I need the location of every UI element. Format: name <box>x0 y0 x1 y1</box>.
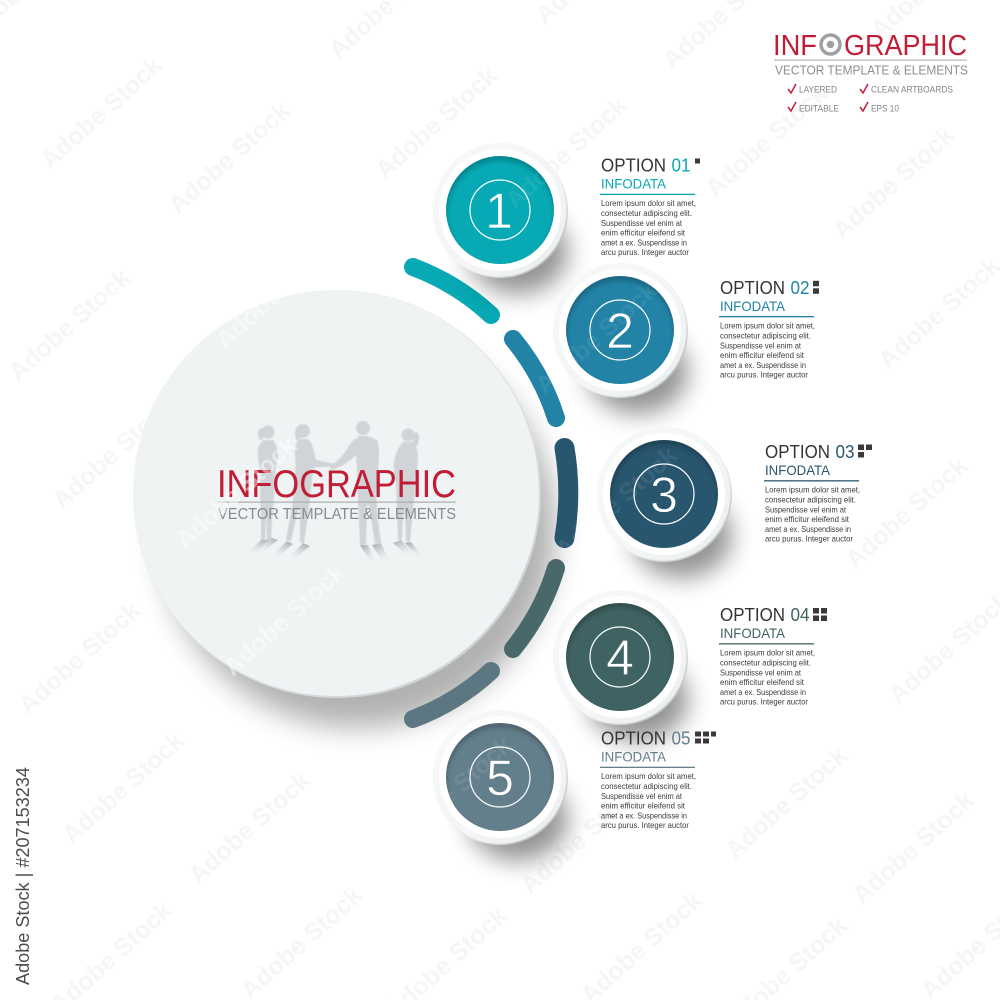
logo: top right infographic header: CLEAN ARTBOARDS <box>871 84 953 94</box>
text block: option 04: OPTION <box>720 604 785 625</box>
title: central infographic heading: VECTOR TEMPLATE & ELEMENTS <box>218 506 456 523</box>
text block: option 03: arcu purus. Integer auctor <box>765 534 853 544</box>
text block: option 05: 05 <box>672 728 690 749</box>
text block: option 04: Suspendisse vel enim at <box>720 668 802 678</box>
person 4 <box>394 428 419 542</box>
vertical stock credit text: Adobe Stock | #207153234 <box>13 767 33 985</box>
text block: option 04: 04 <box>790 604 810 625</box>
illustration: business people silhouettes <box>247 421 424 564</box>
arc segments around central circle <box>413 267 568 719</box>
text block: option 04: amet a ex. Suspendisse in <box>720 687 806 697</box>
text block: option 03: 03 <box>836 441 854 462</box>
option 2 circle <box>553 263 688 414</box>
text block: option 02: enim efficitur eleifend sit <box>720 350 805 360</box>
text: Adobe Stock <box>530 276 663 399</box>
text: Adobe Stock <box>170 431 303 554</box>
text: Adobe Stock <box>47 391 180 514</box>
logo: top right infographic header: EPS 10 <box>871 104 899 114</box>
text block: option 05 <box>600 728 716 830</box>
text block: option 02: INFODATA <box>720 298 786 314</box>
text block: option 02: 02 <box>790 277 810 298</box>
text: Adobe Stock <box>720 741 853 864</box>
text block: option 04 <box>719 604 827 706</box>
text block: option 04: consectetur adipiscing elit. <box>720 658 811 668</box>
text block: option 05: arcu purus. Integer auctor <box>601 820 689 830</box>
text: Adobe Stock <box>3 263 136 386</box>
text: Adobe Stock <box>827 121 960 244</box>
text block: option 02: Suspendisse vel enim at <box>720 340 802 350</box>
person 3 man <box>330 421 381 545</box>
text block: option 03: INFODATA <box>765 462 831 478</box>
logo: top right infographic header: INF <box>773 30 817 62</box>
person 2 <box>286 424 336 543</box>
text block: option 01: enim efficitur eleifend sit <box>601 228 686 238</box>
text block: option 02: OPTION <box>720 277 785 298</box>
text: Adobe Stock <box>210 231 343 354</box>
text block: option 03: consectetur adipiscing elit. <box>765 494 856 504</box>
text block: option 02 <box>719 277 819 379</box>
text: Adobe Stock <box>163 96 296 219</box>
text block: option 05: INFODATA <box>601 748 667 764</box>
text block: option 01: Lorem ipsum dolor sit amet, <box>601 198 696 208</box>
text block: option 05: OPTION <box>601 728 666 749</box>
option 1 circle: 1 <box>485 183 513 239</box>
option 4 circle <box>553 590 688 741</box>
text: Adobe Stock <box>57 726 190 849</box>
logo: top right infographic header: VECTOR TEMPLATE & ELEMENTS <box>775 62 968 78</box>
logo: top right infographic header: LAYERED <box>799 84 837 94</box>
text block: option 01: amet a ex. Suspendisse in <box>601 238 687 248</box>
title: central infographic heading: INFOGRAPHIC <box>217 463 456 506</box>
text block: option 05: Lorem ipsum dolor sit amet, <box>601 771 696 781</box>
logo: top right infographic header: GRAPHIC <box>844 30 967 62</box>
text: Adobe Stock <box>550 441 683 564</box>
text block: option 03: Suspendisse vel enim at <box>765 504 847 514</box>
text block: option 05: consectetur adipiscing elit. <box>601 781 692 791</box>
option 1 circle <box>433 143 568 294</box>
text block: option 04: enim efficitur eleifend sit <box>720 677 805 687</box>
text: Adobe Stock <box>847 786 980 909</box>
text: Adobe Stock <box>183 766 316 889</box>
text: Adobe Stock <box>13 596 146 719</box>
text block: option 01: INFODATA <box>601 176 667 192</box>
title: central infographic heading <box>217 463 456 523</box>
text block: option 04: arcu purus. Integer auctor <box>720 696 808 706</box>
text block: option 02: arcu purus. Integer auctor <box>720 369 808 379</box>
option 5 circle: 5 <box>486 750 514 806</box>
text block: option 05: enim efficitur eleifend sit <box>601 800 686 810</box>
logo: top right infographic header: EDITABLE <box>799 104 839 114</box>
text: Adobe Stock <box>35 51 168 174</box>
text block: option 01: consectetur adipiscing elit. <box>601 208 692 218</box>
text block: option 05: Suspendisse vel enim at <box>601 791 683 801</box>
text block: option 01: arcu purus. Integer auctor <box>601 247 689 257</box>
option 4 circle: 4 <box>606 630 634 686</box>
text block: option 02: amet a ex. Suspendisse in <box>720 360 806 370</box>
text: Adobe Stock <box>500 91 633 214</box>
option 3 circle: 3 <box>650 467 678 523</box>
logo: top right infographic header <box>773 30 968 114</box>
text block: option 01: Suspendisse vel enim at <box>601 218 683 228</box>
text block: option 01 <box>600 155 700 257</box>
text: Adobe Stock <box>218 558 351 681</box>
text block: option 03 <box>764 441 872 544</box>
panel: central circle <box>133 290 556 728</box>
person 1 <box>258 426 278 540</box>
text: Adobe Stock <box>370 61 503 184</box>
text block: option 02: consectetur adipiscing elit. <box>720 330 811 340</box>
foot shadows <box>247 537 424 564</box>
icon: target letter O <box>821 35 840 54</box>
text: Adobe Stock <box>385 731 518 854</box>
option 3 circle <box>597 427 732 578</box>
text block: option 03: amet a ex. Suspendisse in <box>765 524 851 534</box>
text: Adobe Stock <box>515 776 648 899</box>
text: Adobe Stock <box>840 451 973 574</box>
text block: option 04: Lorem ipsum dolor sit amet, <box>720 648 815 658</box>
text block: option 03: OPTION <box>765 441 830 462</box>
text block: option 03: enim efficitur eleifend sit <box>765 514 850 524</box>
text block: option 04: INFODATA <box>720 625 786 641</box>
text block: option 02: Lorem ipsum dolor sit amet, <box>720 320 815 330</box>
text block: option 03: Lorem ipsum dolor sit amet, <box>765 484 860 494</box>
text block: option 05: amet a ex. Suspendisse in <box>601 810 687 820</box>
option 5 circle <box>433 710 568 861</box>
text: Adobe Stock <box>700 79 833 202</box>
text block: option 01: OPTION <box>601 155 666 176</box>
text block: option 01: 01 <box>672 155 690 176</box>
text: Adobe Stock <box>500 91 633 214</box>
option 2 circle: 2 <box>606 303 634 359</box>
text: Adobe Stock <box>370 61 503 184</box>
